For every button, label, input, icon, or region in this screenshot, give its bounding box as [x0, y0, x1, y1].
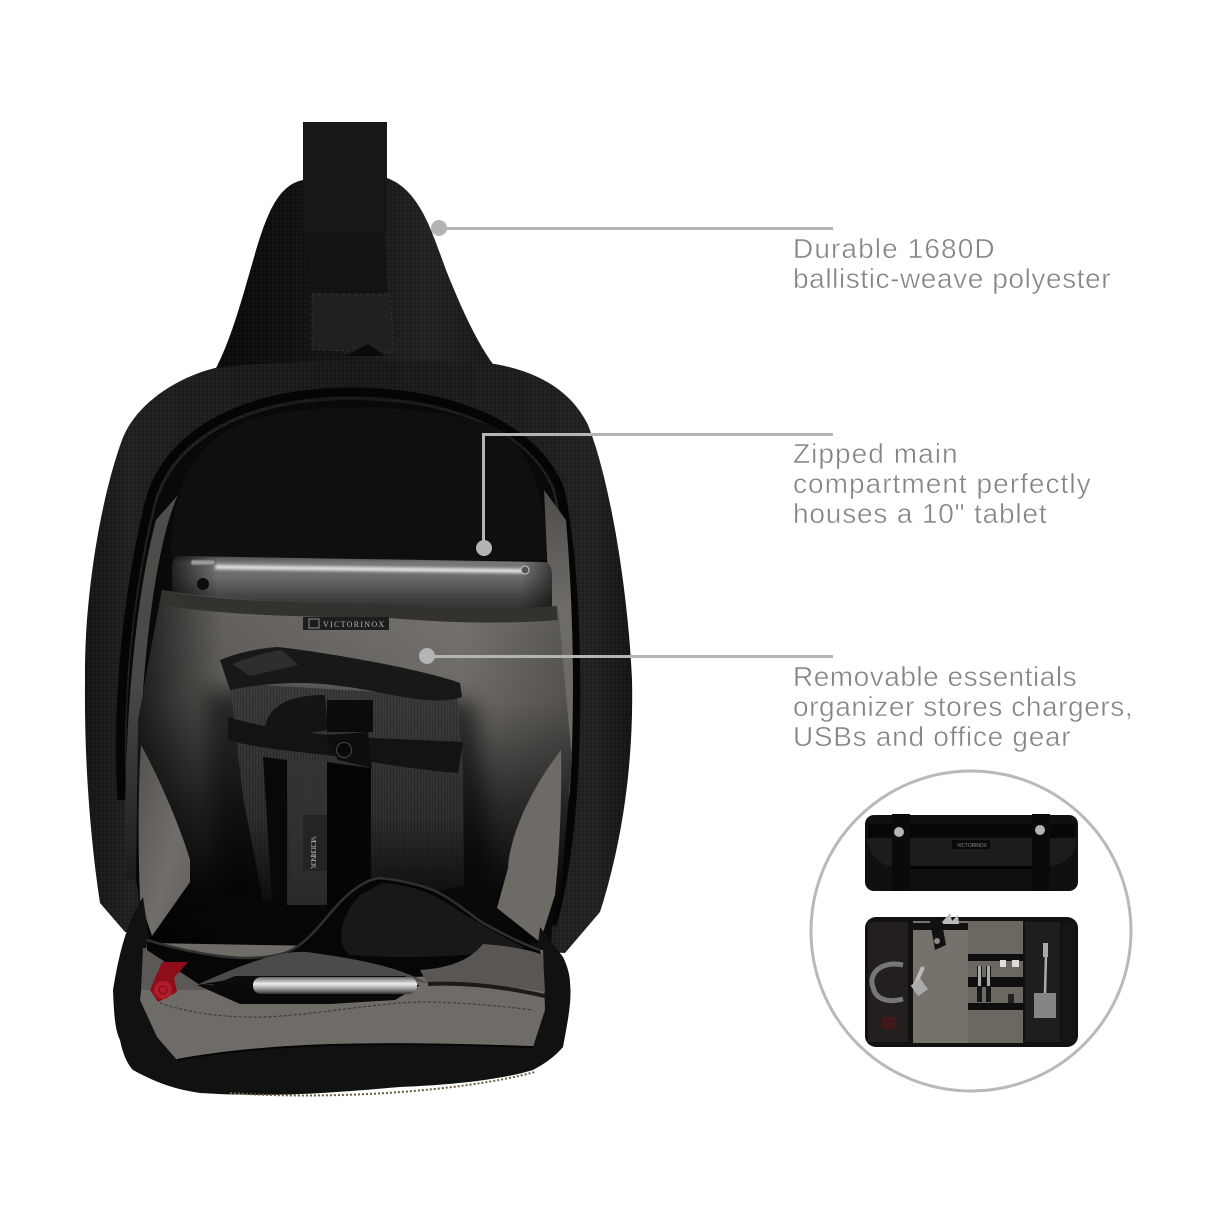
caption: fabric: Durable 1680D	[793, 233, 995, 264]
rolled organizer: VICTORINOX	[957, 843, 988, 849]
open front flap	[113, 897, 571, 1095]
inner flap pocket with phone	[197, 944, 545, 1004]
zip around main compartment	[120, 392, 576, 925]
caption: fabric: ballistic-weave polyester	[793, 263, 1111, 294]
inset: organizer closed and open	[811, 771, 1131, 1091]
interior back wall	[126, 400, 568, 950]
woven brand label: VICTORINOX	[323, 620, 385, 629]
phone	[253, 977, 417, 994]
leader line: organizer	[419, 648, 833, 664]
main body shell	[85, 361, 632, 953]
callout: main compartment	[476, 433, 1100, 556]
vertical brand label: VICTORINOX	[309, 836, 318, 870]
rolled essentials organizer	[220, 647, 464, 910]
left side gusset	[139, 745, 190, 936]
caption: main compartment: Zipped main	[793, 438, 958, 469]
inner zip pocket	[147, 878, 545, 985]
shadow around organizer	[205, 690, 495, 900]
lining strip right	[544, 490, 573, 880]
leader line: fabric	[431, 220, 833, 236]
rolled organizer	[865, 814, 1078, 891]
front organizer pocket	[136, 590, 572, 960]
felt panel in main compartment	[172, 407, 548, 560]
woven brand label	[303, 617, 389, 630]
red accessory	[150, 962, 188, 1002]
cable coil	[872, 964, 903, 1001]
top strap and triangular handle panel	[214, 122, 496, 372]
bag illustration	[85, 122, 632, 1095]
caption: main compartment: houses a 10" tablet	[793, 498, 1047, 529]
tablet	[172, 556, 552, 612]
caption: organizer: organizer stores chargers,	[793, 691, 1133, 722]
vertical brand label	[303, 815, 327, 871]
lining strip left	[125, 495, 178, 880]
callout: fabric	[431, 220, 1111, 294]
right side gusset	[497, 750, 561, 942]
caption: organizer: USBs and office gear	[793, 721, 1071, 752]
caption: organizer: Removable essentials	[793, 661, 1077, 692]
callout: organizer	[419, 648, 1141, 752]
opened organizer	[865, 913, 1078, 1047]
caption: main compartment: compartment perfectly	[793, 468, 1091, 499]
leader line: main compartment	[476, 433, 833, 556]
